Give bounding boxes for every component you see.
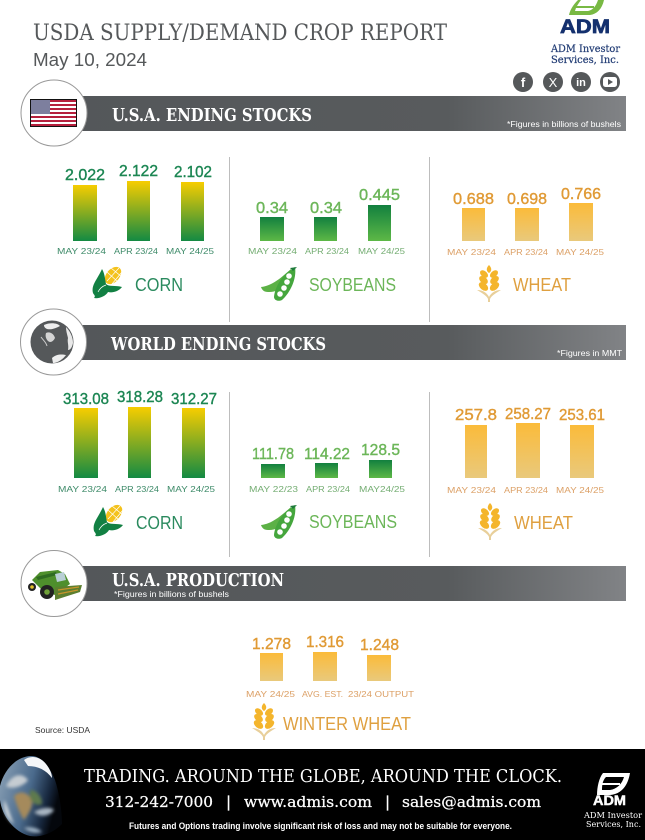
- chart: corn: 2.122: [119, 163, 158, 180]
- chart: corn: 313.08: [63, 391, 109, 408]
- label: corn: CORN: [135, 275, 183, 295]
- footer ADM logo: ADM Investor: [583, 811, 642, 820]
- chart: corn: [58, 389, 217, 494]
- report date: May 10, 2024: [33, 50, 147, 70]
- label: corn: CORN: [136, 513, 183, 533]
- icon: combine harvester: [21, 550, 87, 616]
- chart: corn: MAY 24/25: [166, 246, 214, 256]
- chart: wheat: [447, 406, 605, 495]
- chart: wheat: APR 23/24: [504, 247, 548, 257]
- social icons: in: [576, 77, 586, 89]
- chart: soybeans: [248, 187, 405, 256]
- panel: U.S.A. ending stocks: [21, 80, 626, 322]
- chart: corn: 2.102: [174, 164, 212, 181]
- footer ADM logo: ADM: [593, 792, 626, 808]
- disclaimer: Futures and Options trading involve significant risk of loss and may not be suitable for everyone.: [129, 821, 512, 831]
- chart: winter wheat: 1.248: [360, 637, 399, 654]
- icon: globe: [20, 309, 86, 375]
- panel: U.S.A. production: [21, 550, 626, 740]
- ADM logo: ADM Investor: [550, 44, 620, 55]
- banner: *Figures in MMT: [557, 348, 622, 358]
- banner: WORLD ENDING STOCKS: [110, 334, 326, 355]
- banner: *Figures in billions of bushels: [507, 119, 621, 129]
- chart: corn: MAY 23/24: [58, 484, 107, 494]
- contact line: 312-242-7000: [105, 793, 213, 811]
- source note: Source: USDA: [35, 725, 90, 735]
- chart: wheat: 0.766: [561, 186, 601, 203]
- footer ADM logo: [583, 773, 642, 829]
- banner: [68, 566, 626, 601]
- icon: wheat: [478, 503, 502, 540]
- ADM logo: Services, Inc.: [551, 55, 619, 66]
- contact line: |: [226, 793, 231, 811]
- contact line: sales@admis.com: [402, 793, 541, 811]
- contact line: [105, 793, 541, 811]
- panel: world ending stocks: [20, 309, 626, 557]
- chart: wheat: MAY 24/25: [556, 485, 604, 495]
- label: winter wheat: WINTER WHEAT: [283, 714, 411, 734]
- icon: wheat: [477, 265, 501, 302]
- chart: corn: MAY 23/24: [57, 246, 106, 256]
- contact line: www.admis.com: [244, 793, 372, 811]
- banner: [68, 96, 626, 131]
- banner: *Figures in billions of bushels: [114, 589, 229, 599]
- chart: wheat: MAY 23/24: [447, 247, 496, 257]
- chart: wheat: 253.61: [559, 407, 605, 424]
- chart: wheat: 0.698: [507, 191, 547, 208]
- chart: soybeans: MAY 24/25: [358, 246, 405, 256]
- chart: soybeans: APR 23/24: [305, 246, 349, 256]
- chart: wheat: 257.8: [455, 407, 497, 424]
- chart: winter wheat: [246, 634, 415, 699]
- chart: soybeans: 0.34: [256, 200, 288, 217]
- label: soybeans: SOYBEANS: [309, 275, 396, 295]
- chart: corn: [57, 163, 214, 256]
- icon: corn: [94, 502, 126, 536]
- ADM logo: [550, 0, 620, 66]
- chart: soybeans: 111.78: [252, 446, 294, 463]
- footer ADM logo: Services, Inc.: [586, 820, 641, 829]
- chart: corn: 2.022: [65, 167, 105, 184]
- chart: winter wheat: 23/24 OUTPUT: [348, 689, 415, 699]
- icon: US flag: [21, 80, 87, 146]
- social icons: [513, 72, 620, 92]
- chart: soybeans: MAY24/25: [359, 484, 405, 494]
- chart: soybeans: [249, 442, 405, 494]
- chart: soybeans: APR 23/24: [306, 484, 350, 494]
- footer: [0, 749, 645, 840]
- chart: corn: APR 23/24: [115, 484, 159, 494]
- chart: soybeans: 0.445: [359, 187, 400, 204]
- chart: corn: APR 23/24: [114, 246, 158, 256]
- chart: wheat: 258.27: [505, 406, 551, 423]
- ADM logo: ADM: [560, 17, 610, 38]
- social icons: f: [521, 75, 526, 90]
- chart: soybeans: 0.34: [310, 200, 342, 217]
- chart: soybeans: 128.5: [361, 442, 400, 459]
- icon: earth: [0, 756, 62, 836]
- icon: soybean pod: [261, 505, 297, 539]
- chart: soybeans: MAY 23/24: [248, 246, 297, 256]
- banner: [68, 325, 626, 360]
- banner: U.S.A. ENDING STOCKS: [112, 105, 312, 126]
- chart: winter wheat: AVG. EST.: [302, 689, 343, 699]
- chart: corn: 318.28: [117, 389, 163, 406]
- icon: corn: [93, 264, 125, 298]
- contact line: |: [385, 793, 390, 811]
- chart: soybeans: MAY 22/23: [249, 484, 298, 494]
- label: wheat: WHEAT: [513, 275, 571, 295]
- label: wheat: WHEAT: [514, 513, 573, 533]
- chart: winter wheat: 1.278: [252, 636, 291, 653]
- label: soybeans: SOYBEANS: [309, 512, 397, 532]
- social icons: X: [549, 75, 558, 90]
- icon: wheat: [252, 703, 276, 740]
- chart: soybeans: 114.22: [304, 446, 350, 463]
- icon: soybean pod: [261, 267, 297, 301]
- chart: corn: 312.27: [171, 391, 217, 408]
- banner: U.S.A. PRODUCTION: [112, 570, 284, 591]
- chart: wheat: APR 23/24: [504, 485, 548, 495]
- chart: wheat: MAY 23/24: [447, 485, 496, 495]
- chart: corn: MAY 24/25: [167, 484, 215, 494]
- chart: wheat: MAY 24/25: [556, 247, 604, 257]
- chart: wheat: 0.688: [453, 191, 494, 208]
- title: USDA SUPPLY/DEMAND CROP REPORT: [33, 21, 447, 46]
- chart: wheat: [447, 186, 604, 257]
- chart: winter wheat: MAY 24/25: [246, 689, 295, 699]
- chart: winter wheat: 1.316: [306, 634, 344, 651]
- tagline: TRADING. AROUND THE GLOBE, AROUND THE CLOCK.: [84, 766, 562, 787]
